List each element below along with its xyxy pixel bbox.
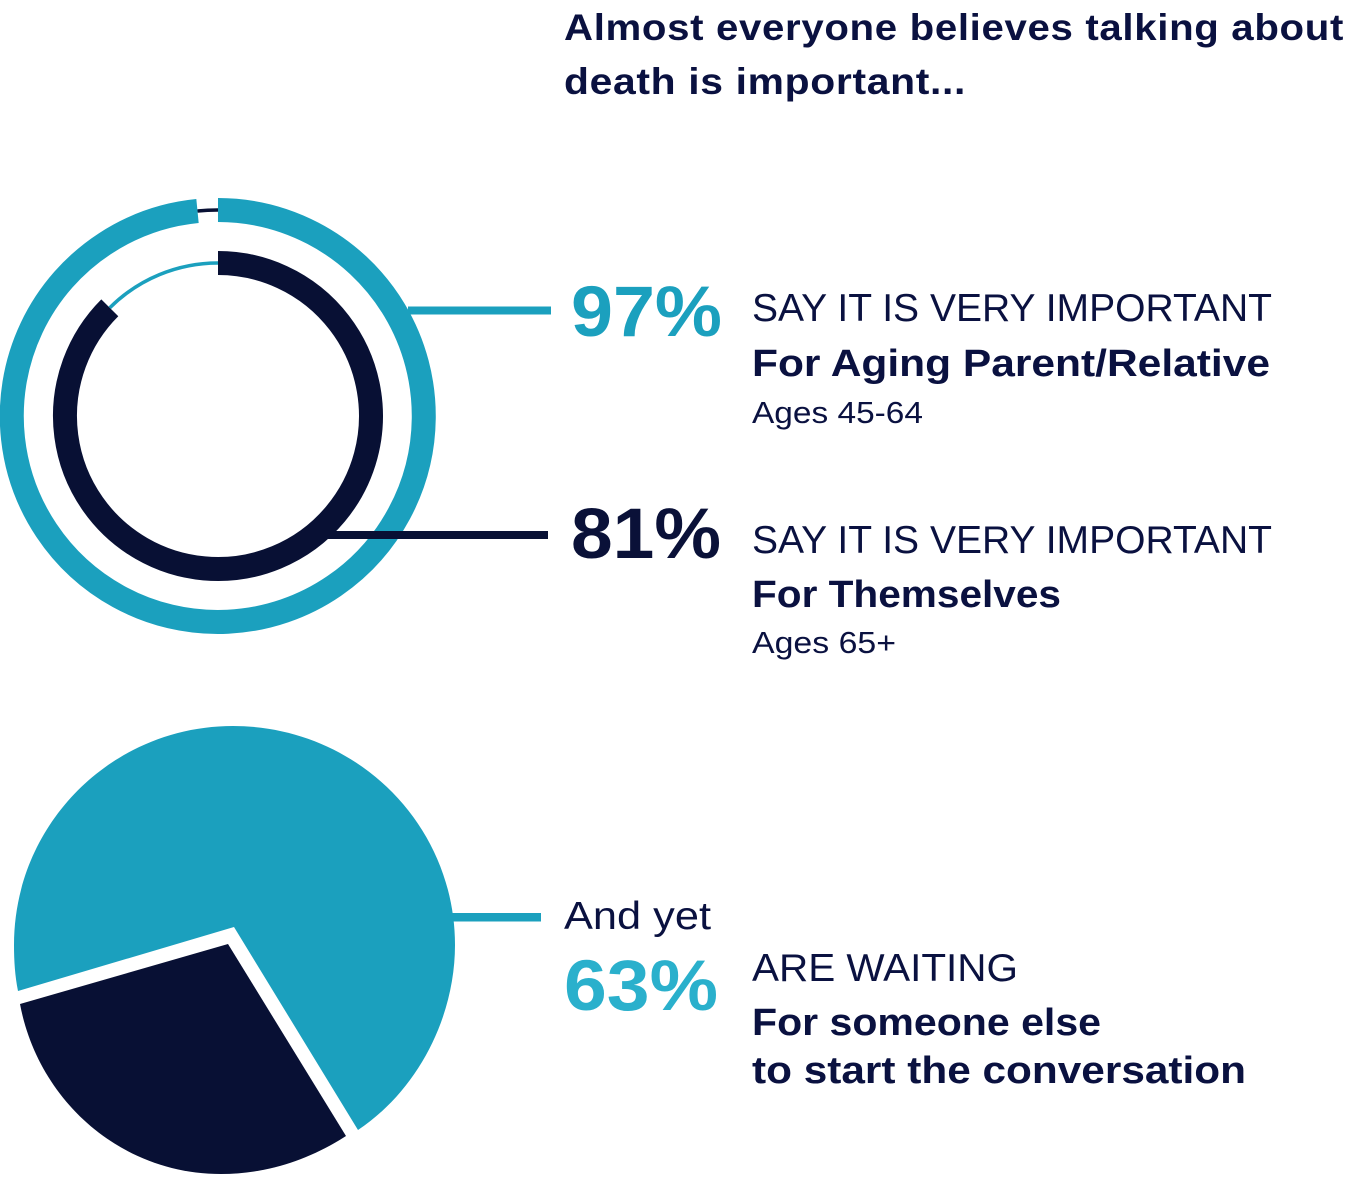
pie slice small: [20, 944, 346, 1174]
stat: 81%: 81%: [571, 495, 721, 574]
stat text: waiting: ARE WAITING: [752, 947, 1018, 990]
stat text: aging parent: For Aging Parent/Relative: [752, 343, 1270, 385]
and yet label: And yet: [564, 895, 711, 938]
donut chart: [12, 210, 424, 622]
connector line 97%: [408, 306, 551, 314]
pie slice large: [14, 726, 455, 1130]
stat text: aging parent: [752, 287, 1272, 430]
stat text: waiting: [752, 947, 1246, 1092]
outer ring thin remainder: [198, 210, 218, 211]
inner ring 81%: [65, 263, 371, 569]
title: Almost everyone believes talking about: [564, 7, 1344, 48]
outer ring 97%: [12, 210, 424, 622]
stat text: themselves: For Themselves: [752, 574, 1061, 616]
stat text: themselves: Ages 65+: [752, 625, 896, 660]
title: death is important...: [564, 61, 966, 102]
stat: 97%: 97%: [571, 273, 722, 352]
stat text: themselves: [752, 519, 1272, 660]
stat: 63%: 63%: [564, 947, 718, 1026]
inner ring thin remainder: [110, 263, 218, 308]
stat text: aging parent: Ages 45-64: [752, 395, 923, 430]
stat text: waiting: For someone else: [752, 1002, 1101, 1044]
pie chart: [14, 726, 455, 1174]
connector line 63%: [452, 913, 541, 922]
title: [564, 7, 1344, 102]
connector line 81%: [328, 531, 548, 539]
stat text: themselves: SAY IT IS VERY IMPORTANT: [752, 519, 1272, 562]
stat text: aging parent: SAY IT IS VERY IMPORTANT: [752, 287, 1272, 330]
stat text: waiting: to start the conversation: [752, 1050, 1246, 1092]
